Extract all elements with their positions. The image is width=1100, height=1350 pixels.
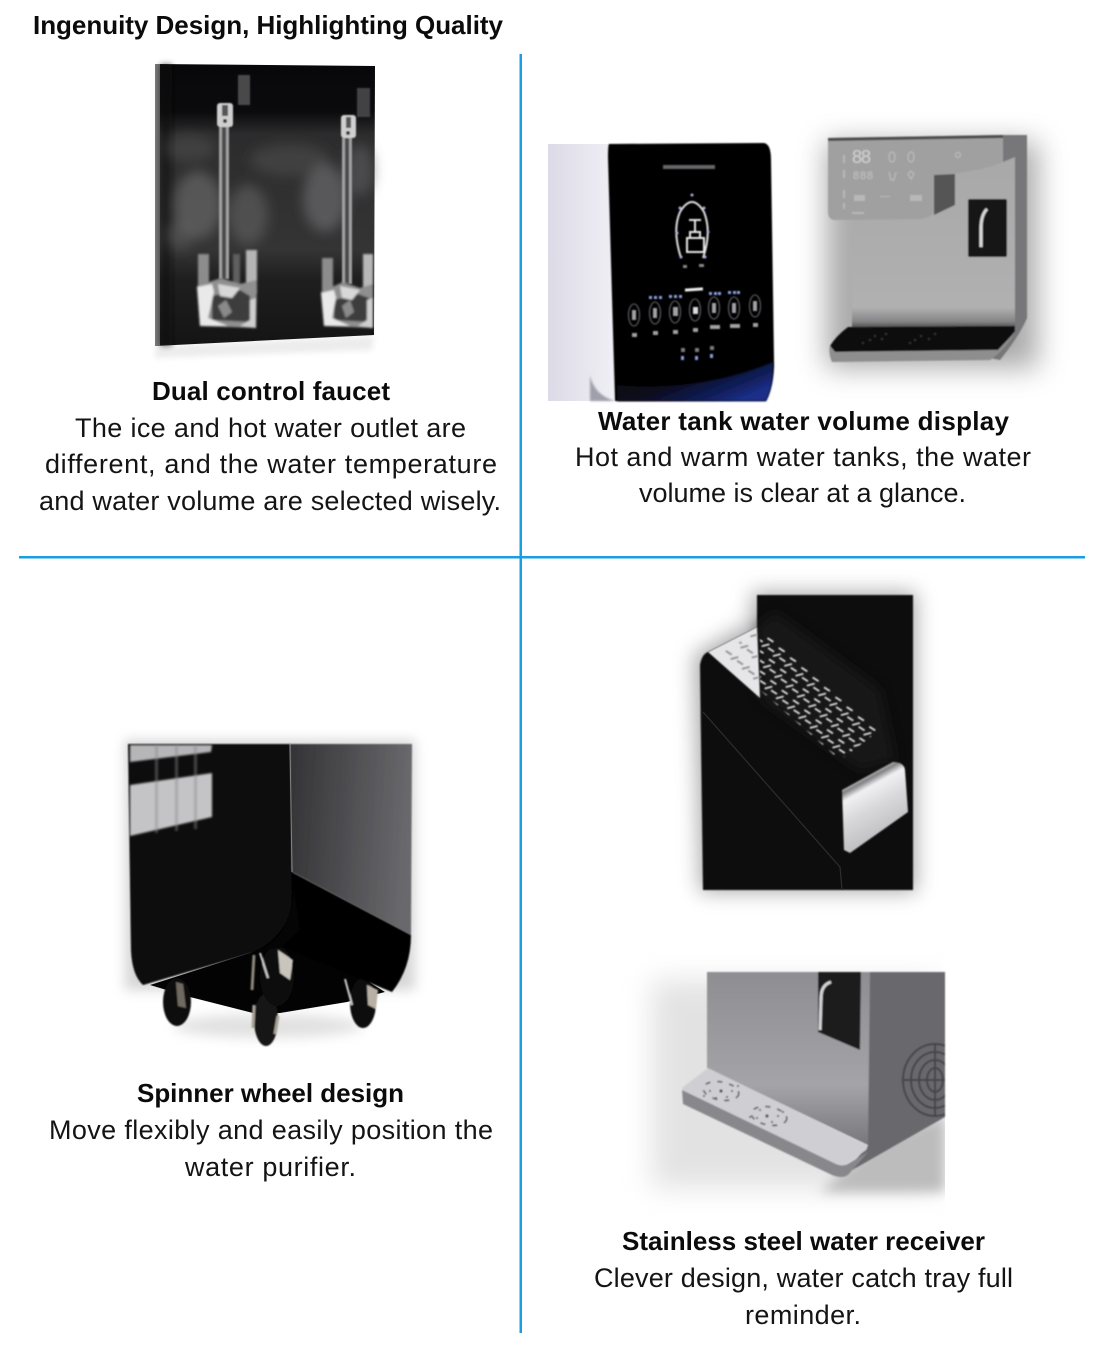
text block: water receiver description: Clever design, water catch tray full — [594, 1263, 1013, 1293]
text block: dual control description: and water volume are selected wisely. — [39, 486, 501, 516]
heading: dual control faucet: Dual control faucet — [152, 376, 390, 406]
text block: dual control description: different, and the water temperature — [45, 449, 497, 479]
text block: dual control description: The ice and hot water outlet are — [75, 413, 466, 443]
text block: spinner wheel description: water purifier. — [184, 1152, 356, 1182]
image: dispenser front: 888 — [853, 170, 873, 182]
text block: water tank description — [575, 442, 1031, 508]
image: spinner wheels — [125, 740, 415, 1046]
image: water tray — [652, 965, 967, 1205]
divider: vertical — [520, 54, 522, 1333]
heading: stainless steel water receiver: Stainless steel water receiver — [622, 1226, 985, 1256]
title: Ingenuity Design, Highlighting Quality — [33, 10, 504, 40]
text block: water tank description: Hot and warm water tanks, the water — [575, 442, 1031, 472]
image: control panel — [548, 143, 774, 401]
text block: water tank description: volume is clear at a glance. — [639, 478, 966, 508]
panel: spinner wheel design — [49, 740, 493, 1182]
divider: horizontal — [19, 556, 1085, 558]
image: dispenser front — [826, 135, 1038, 368]
image: top grille and handle — [694, 592, 916, 892]
heading: spinner wheel design: Spinner wheel design — [137, 1078, 404, 1108]
heading: water tank water volume display: Water tank water volume display — [598, 406, 1010, 436]
text block: water receiver description: reminder. — [745, 1300, 861, 1330]
panel: stainless steel water receiver — [594, 592, 1013, 1330]
text block: spinner wheel description — [49, 1115, 493, 1182]
panel: dual control faucet — [39, 64, 501, 516]
image: dual faucets — [155, 64, 375, 358]
text block: dual control description — [39, 413, 501, 516]
image: dispenser front: 88 — [852, 147, 871, 167]
text block: water receiver description — [594, 1263, 1013, 1330]
panel: water tank volume display — [548, 135, 1038, 508]
text block: spinner wheel description: Move flexibly and easily position the — [49, 1115, 493, 1145]
